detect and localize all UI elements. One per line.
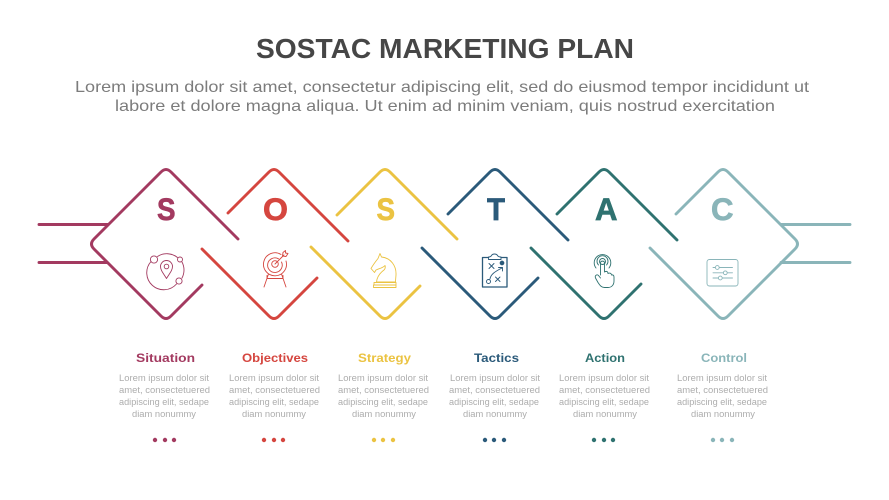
diamond: Tactics (422, 170, 568, 318)
panel: Situation (92, 170, 238, 442)
diamond: Strategy (311, 170, 457, 318)
letter O: O (263, 191, 288, 227)
icon: target (263, 250, 288, 287)
text: Tactics: diam nonummy (463, 409, 527, 420)
label: Control: Control (701, 351, 747, 365)
panel: Control (650, 170, 798, 442)
icon: chess knight (371, 254, 396, 288)
dots (592, 438, 615, 442)
right connector lines (781, 224, 850, 262)
letter S: S (157, 191, 176, 227)
text: Situation: amet, consectetuered (119, 385, 210, 396)
dots (711, 438, 734, 442)
text: Control: diam nonummy (691, 409, 755, 420)
diamond: Objectives (202, 170, 348, 318)
title: SOSTAC MARKETING PLAN (256, 33, 634, 64)
diamond: Situation (92, 170, 238, 318)
text: Tactics: Lorem ipsum dolor sit (450, 373, 540, 384)
text: Action (559, 373, 650, 420)
label: Situation: Situation (136, 351, 195, 365)
dots (372, 438, 395, 442)
letter C: C (711, 191, 734, 227)
text: Situation: Lorem ipsum dolor sit (119, 373, 209, 384)
text: Objectives: adipiscing elit, sedape (229, 397, 319, 408)
letter S: S (376, 191, 395, 227)
left connector lines (39, 224, 108, 262)
icon: clipboard (482, 254, 507, 287)
text: Action: diam nonummy (573, 409, 637, 420)
dots (153, 438, 176, 442)
text: Objectives: Lorem ipsum dolor sit (229, 373, 319, 384)
text: Situation: diam nonummy (132, 409, 196, 420)
text: Control: Lorem ipsum dolor sit (677, 373, 767, 384)
icon: location orbit (147, 254, 184, 290)
dots (262, 438, 285, 442)
text: Tactics (449, 373, 540, 420)
panel: Action (531, 170, 677, 442)
text: Action: Lorem ipsum dolor sit (559, 373, 649, 384)
text: Strategy: amet, consectetuered (338, 385, 429, 396)
text: Situation: adipiscing elit, sedape (119, 397, 209, 408)
letter T: T (487, 191, 505, 227)
text: Tactics: amet, consectetuered (449, 385, 540, 396)
subtitle: labore et dolore magna aliqua. Ut enim ad minim veniam, quis nostrud exercitation (115, 98, 775, 115)
text: Strategy: diam nonummy (352, 409, 416, 420)
text: Action: adipiscing elit, sedape (559, 397, 649, 408)
text: Control: adipiscing elit, sedape (677, 397, 767, 408)
panel: Strategy (311, 170, 457, 442)
panel: Tactics (422, 170, 568, 442)
text: Control: amet, consectetuered (677, 385, 768, 396)
subtitle (75, 79, 810, 115)
diamond: Control (650, 170, 798, 318)
text: Objectives: amet, consectetuered (229, 385, 320, 396)
diamond: Action (531, 170, 677, 318)
icon: sliders (707, 260, 738, 286)
text: Action: amet, consectetuered (559, 385, 650, 396)
text: Control (677, 373, 768, 420)
dots (483, 438, 506, 442)
label: Action: Action (585, 351, 625, 365)
text: Strategy: adipiscing elit, sedape (338, 397, 428, 408)
text: Objectives: diam nonummy (242, 409, 306, 420)
label: Objectives: Objectives (242, 351, 308, 365)
panel: Objectives (202, 170, 348, 442)
label: Tactics: Tactics (474, 351, 519, 365)
text: Tactics: adipiscing elit, sedape (449, 397, 539, 408)
icon: touch hand (594, 255, 614, 288)
text: Objectives (229, 373, 320, 420)
label: Strategy: Strategy (358, 351, 411, 365)
text: Situation (119, 373, 210, 420)
letter A: A (595, 191, 618, 227)
text: Strategy: Lorem ipsum dolor sit (338, 373, 428, 384)
text: Strategy (338, 373, 429, 420)
subtitle: Lorem ipsum dolor sit amet, consectetur adipiscing elit, sed do eiusmod tempor incididunt ut (75, 79, 810, 96)
